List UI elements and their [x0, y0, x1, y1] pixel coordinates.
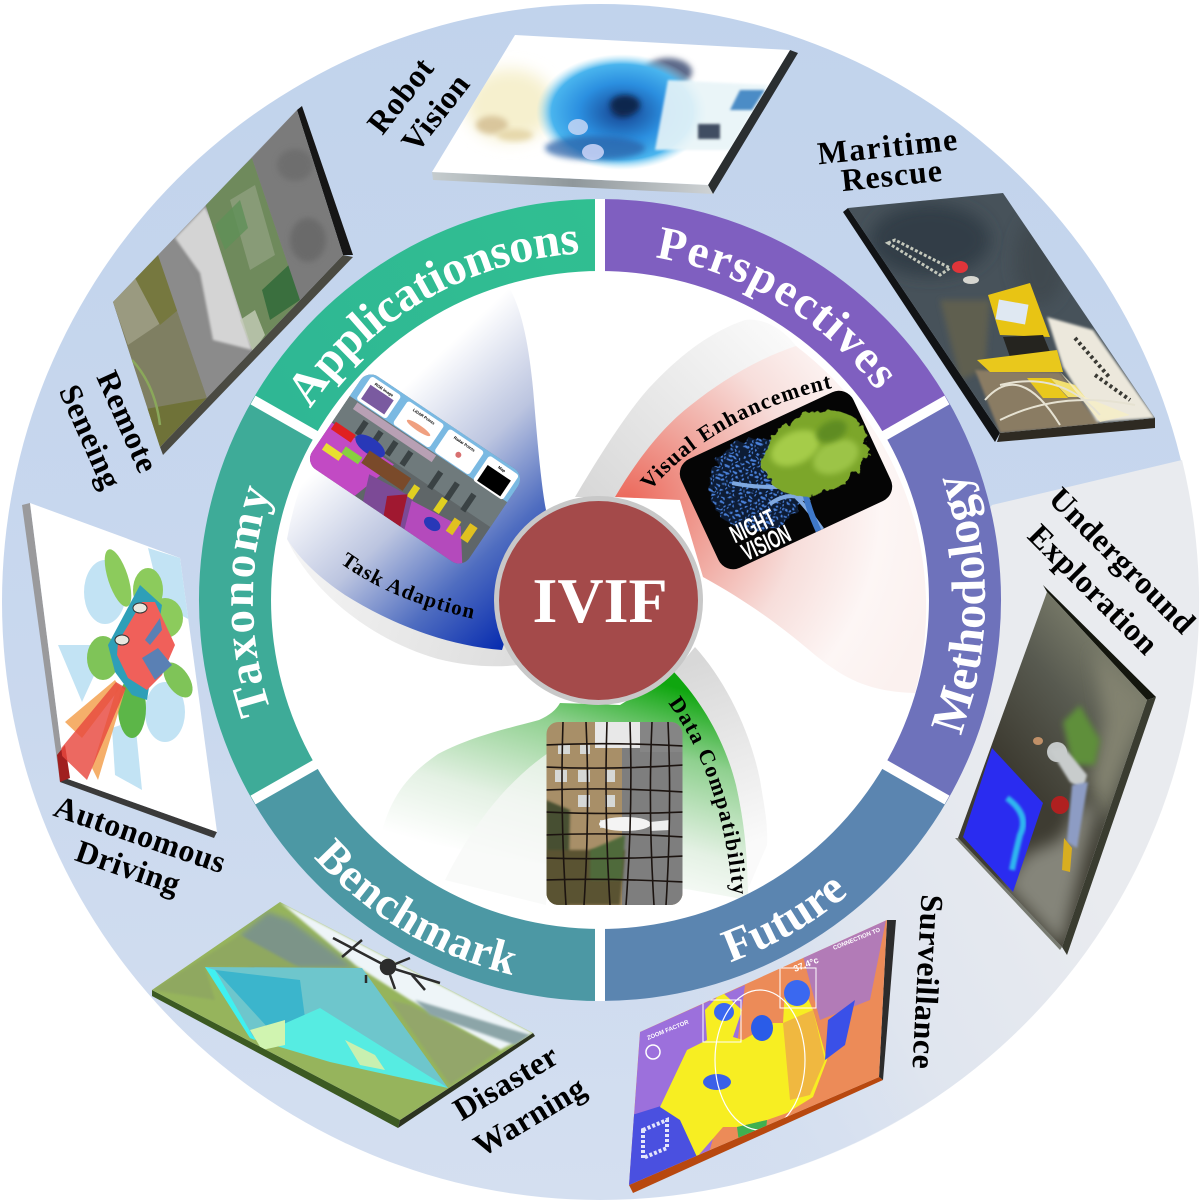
- segment: applications: [253, 199, 600, 436]
- label: maritime rescue: Maritime: [816, 121, 960, 171]
- night vision wordmark: [726, 501, 795, 568]
- segment: methodology: [885, 400, 1001, 800]
- panel: underground exploration image: [955, 585, 1156, 955]
- image: night vision tree: [680, 390, 892, 570]
- segment: benchmark: [253, 764, 600, 1001]
- grey sector of outer disc: [600, 460, 1199, 1198]
- label: data compatibility: Data Compatibility: [668, 695, 746, 894]
- panel: robot vision image: [432, 35, 798, 194]
- thermal inset: [963, 748, 1043, 892]
- label: remote sensing: Remote: [90, 365, 166, 478]
- label: robot vision: Robot: [360, 50, 441, 140]
- heading: applicationsons: Applicationsons: [292, 232, 578, 408]
- label: underground exploration: Exploration: [1021, 517, 1166, 662]
- panel: surveillance thermal image: ZOOM FACTOR: [647, 1019, 690, 1042]
- segment: taxonomy: [199, 400, 315, 800]
- label: robot vision: Vision: [394, 66, 477, 159]
- icon: drone: [333, 938, 440, 990]
- panel: disaster warning image: [152, 902, 535, 1128]
- panel: autonomous driving image: [22, 503, 217, 838]
- blade: data compatibility: [381, 647, 767, 905]
- mini cards: RGB Image: [374, 382, 395, 398]
- night vision wordmark: VISION: [737, 520, 795, 567]
- label: underground exploration: Underground: [1042, 480, 1200, 641]
- panel: maritime rescue image: [843, 193, 1155, 442]
- centre circle: IVIF: IVIF: [532, 565, 668, 636]
- image: task adaption scene: [305, 369, 525, 569]
- mini cards: [355, 376, 519, 500]
- label: disaster warning: [447, 1037, 592, 1164]
- label: visual enhancement: Visual Enhancement: [640, 376, 832, 486]
- segment: future: [600, 764, 947, 1001]
- label: disaster warning: Warning: [467, 1069, 592, 1164]
- segment: perspectives: [600, 199, 947, 436]
- label: remote sensing: Seneing: [52, 379, 130, 494]
- panel: surveillance thermal image: 37.4°c: [792, 955, 820, 974]
- panel: remote sensing image: [113, 106, 353, 455]
- panel: surveillance thermal image: CONNECTION TO: [833, 927, 882, 952]
- mini cards: LiDAR Points: [412, 407, 437, 426]
- segment ring: [199, 199, 1001, 1001]
- label: maritime rescue: [816, 121, 960, 198]
- mini cards: Radar Points: [453, 435, 477, 453]
- segment separators: [253, 199, 947, 1001]
- label: autonomous driving: Driving: [71, 832, 185, 902]
- heading: taxonomy: Taxonomy: [230, 485, 276, 719]
- heading: future: Future: [720, 880, 847, 962]
- heading: perspectives: Perspectives: [656, 227, 892, 388]
- image: building behind net: [546, 722, 684, 905]
- mini cards: Map: [497, 465, 507, 474]
- centre circle: IVIF: [496, 498, 700, 702]
- label: task adaption: Task Adaption: [342, 552, 474, 619]
- label: disaster warning: Disaster: [447, 1037, 564, 1127]
- label: remote sensing: [52, 365, 166, 494]
- label: surveillance: Surveillance: [905, 894, 951, 1070]
- night vision wordmark: NIGHT: [726, 504, 780, 549]
- heading: benchmark: Benchmark: [314, 837, 516, 975]
- blade: task adaption: [287, 283, 546, 666]
- heading: methodology: Methodology: [931, 478, 986, 736]
- label: robot vision: [360, 50, 477, 159]
- label: maritime rescue: Rescue: [839, 152, 944, 198]
- inner white disc: [270, 270, 930, 930]
- label: autonomous driving: Autonomous: [50, 788, 231, 880]
- panel: surveillance thermal image: [629, 915, 896, 1193]
- blade: visual enhancement: [575, 320, 926, 693]
